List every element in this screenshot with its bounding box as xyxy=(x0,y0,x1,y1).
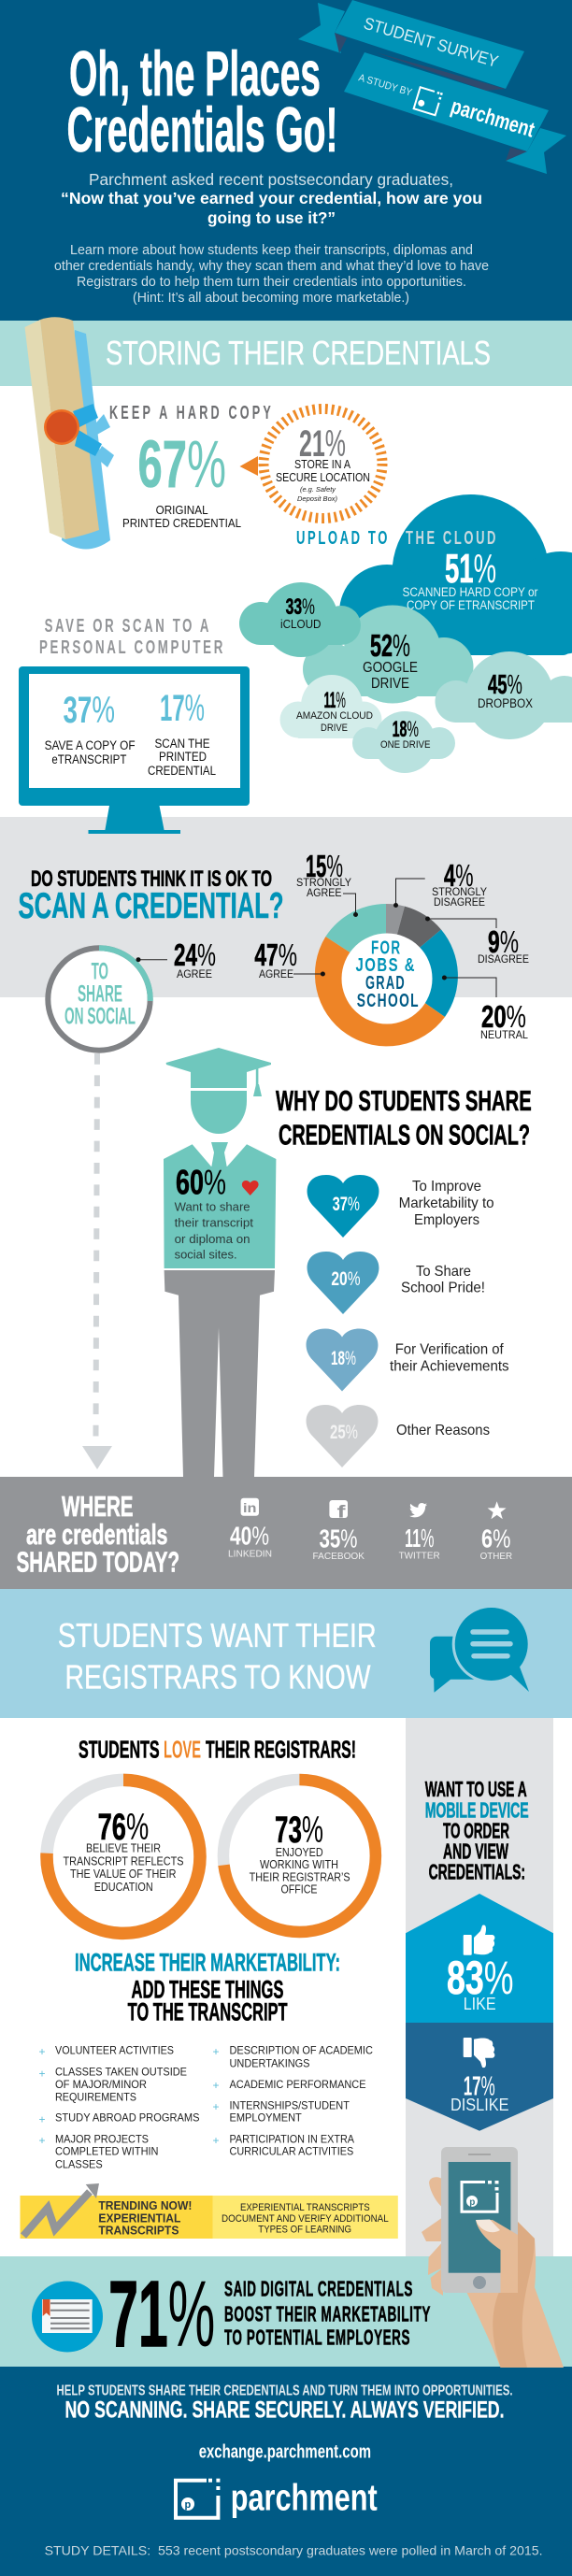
heading: increase their marketability: TO THE TRANSCRIPT xyxy=(128,1998,288,2026)
icon: graduate figure xyxy=(164,1048,276,1477)
donut chart: for jobs and grad school: SCHOOL xyxy=(357,991,420,1011)
donut label: 9% disagree: DISAGREE xyxy=(478,954,529,966)
donut label: 47% agree: AGREE xyxy=(259,969,293,980)
donut label: 4% strongly disagree xyxy=(393,858,487,909)
icon: hand holding phone xyxy=(422,2147,564,2368)
cloud: 51% scanned xyxy=(339,494,572,660)
icon: computer monitor with stats: 17% xyxy=(160,688,205,729)
stat: 71% boost marketability: 71% xyxy=(108,2262,215,2367)
list: transcript additions column two: UNDERTAKINGS xyxy=(230,2057,310,2070)
logo: parchment: p xyxy=(185,2499,191,2511)
ring chart: to share on social xyxy=(48,948,150,1051)
ring chart: 73% enjoyed: WORKING WITH xyxy=(260,1858,338,1871)
ribbon: student survey xyxy=(298,0,566,174)
intro text: Parchment asked recent postsecondary graduates, xyxy=(89,170,453,189)
stat: 71% boost marketability xyxy=(108,2262,431,2367)
cloud: 33% icloud: 33% xyxy=(286,594,315,620)
icon: computer monitor with stats: SCAN THE xyxy=(155,737,209,751)
donut label: 20% neutral xyxy=(442,976,529,1041)
list: transcript additions column two: EMPLOYMENT xyxy=(230,2111,302,2125)
ring chart: 73% enjoyed: ENJOYED xyxy=(276,1846,323,1859)
heart stat: 20% school pride: 20% xyxy=(331,1268,361,1290)
heart stat: 37% marketability: To Improve xyxy=(412,1179,481,1195)
donut label: 4% strongly disagree: STRONGLY xyxy=(432,887,487,898)
list: transcript additions column two: DESCRIPTION OF ACADEMIC xyxy=(230,2043,373,2056)
cloud: 11% amazon cloud drive xyxy=(280,675,381,738)
stat: other 6%: OTHER xyxy=(480,1551,512,1562)
ring chart: 76% believe: TRANSCRIPT REFLECTS xyxy=(64,1855,183,1868)
stat: 17% dislike xyxy=(406,2023,553,2131)
intro text xyxy=(54,170,489,306)
list: transcript additions column one: CLASSES xyxy=(55,2157,103,2170)
heart stat: 25% other reasons: 25% xyxy=(330,1422,358,1443)
intro text: “Now that you’ve earned your credential, how are you xyxy=(61,189,482,208)
heading: students want their registrars to know: STUDENTS WANT THEIR xyxy=(58,1616,377,1654)
list: transcript additions column two: + xyxy=(213,2045,220,2058)
heading: students want their registrars to know xyxy=(58,1616,377,1696)
heading: save or scan to a personal computer xyxy=(39,616,225,658)
stat: linkedin 40%: LINKEDIN xyxy=(228,1549,272,1560)
stat: 83% like xyxy=(406,1894,553,2023)
panel: mobile device heading xyxy=(425,1777,529,1884)
donut chart: for jobs and grad school: FOR xyxy=(371,938,401,959)
icon: computer monitor with stats: eTRANSCRIPT xyxy=(51,752,126,766)
donut label: 4% strongly disagree: DISAGREE xyxy=(434,897,485,909)
ring chart: 73% enjoyed: OFFICE xyxy=(280,1883,318,1896)
footer call to action xyxy=(56,2383,512,2462)
stat: other 6% xyxy=(480,1501,512,1562)
list: transcript additions column one: + xyxy=(39,2067,46,2080)
stat: linkedin 40%: in xyxy=(243,1500,256,1515)
arrow: to 67% xyxy=(239,456,258,476)
heading: students want their registrars to know: REGISTRARS TO KNOW xyxy=(65,1658,371,1696)
callout: trending now experiential transcripts: EXPERIENTIAL xyxy=(98,2211,180,2225)
ring chart: to share on social: SHARE xyxy=(78,981,122,1008)
logo: parchment xyxy=(174,2478,378,2520)
heart stat: 37% marketability xyxy=(307,1175,494,1238)
stat: facebook 35%: 35% xyxy=(320,1524,357,1553)
stat: 83% like: 83% xyxy=(447,1952,514,2004)
donut label: 20% neutral: 20% xyxy=(481,999,526,1034)
cloud: 45% dropbox: 45% xyxy=(488,670,522,700)
cloud: 51% scanned: SCANNED HARD COPY or xyxy=(402,585,538,599)
stat: twitter 11%: TWITTER xyxy=(399,1551,440,1562)
stat: 83% like: LIKE xyxy=(464,1995,496,2013)
arrow: dashed down to where shared xyxy=(82,1053,112,1469)
list: transcript additions column one: + xyxy=(39,2134,46,2147)
callout: secure location: 21% xyxy=(299,423,346,465)
donut chart: for jobs and grad school: JOBS & xyxy=(355,955,416,976)
heading: students love their registrars: LOVE xyxy=(164,1736,201,1764)
icon: digital document in circle xyxy=(32,2281,103,2352)
cloud: 11% amazon cloud drive: AMAZON CLOUD xyxy=(296,710,373,722)
heading: do students think it is ok to scan xyxy=(19,866,284,926)
donut label: 15% strongly agree: STRONGLY xyxy=(296,878,351,889)
ring chart: to share on social: TO xyxy=(92,959,108,985)
ring chart: 73% enjoyed: 73% xyxy=(275,1810,323,1851)
intro text: other credentials handy, why they scan them and what they’d love to have xyxy=(54,259,489,274)
list: transcript additions column two: + xyxy=(213,2079,220,2092)
heart stat: 18% verification xyxy=(307,1329,509,1391)
list: transcript additions column one xyxy=(39,2043,200,2170)
cloud: 51% scanned: 51% xyxy=(445,546,496,592)
stat: 60% want to share: their transcript xyxy=(175,1216,253,1230)
ring chart: 76% believe: 76% xyxy=(98,1807,149,1848)
cloud: 18% one drive: ONE DRIVE xyxy=(380,739,430,751)
donut label: 20% neutral: NEUTRAL xyxy=(480,1030,529,1041)
list: transcript additions column two xyxy=(213,2043,373,2158)
list: transcript additions column one: STUDY ABROAD PROGRAMS xyxy=(55,2111,200,2125)
ring chart: 73% enjoyed: THEIR REGISTRAR’S xyxy=(250,1871,350,1884)
donut label: 47% agree xyxy=(254,937,325,980)
callout: secure location: SECURE LOCATION xyxy=(276,471,370,484)
icon: computer monitor with stats: SAVE A COPY OF xyxy=(45,738,136,752)
list: transcript additions column two: + xyxy=(213,2100,220,2113)
heading: where are credentials shared today xyxy=(17,1490,179,1579)
heading: students love their registrars xyxy=(79,1736,356,1764)
list: transcript additions column two: PARTICIPATION IN EXTRA xyxy=(230,2132,354,2145)
icon: computer monitor with stats: PRINTED xyxy=(159,750,207,764)
heading: where are credentials shared today: SHARED TODAY? xyxy=(17,1546,179,1579)
title: Oh, the Places xyxy=(69,38,321,109)
panel: keep a hard copy: KEEP A HARD COPY xyxy=(109,403,274,423)
panel: keep a hard copy: ORIGINAL xyxy=(156,503,208,517)
list: transcript additions column two: ACADEMIC PERFORMANCE xyxy=(230,2078,366,2091)
ribbon: student survey: parchment xyxy=(449,93,537,142)
heart stat: 37% marketability: 37% xyxy=(333,1194,360,1215)
heading: save or scan to a personal computer: PERSONAL COMPUTER xyxy=(39,637,225,658)
stat: 17% dislike: 17% xyxy=(464,2072,495,2102)
intro text: going to use it?” xyxy=(207,208,336,227)
stat: twitter 11%: 11% xyxy=(405,1524,434,1553)
donut label: 15% strongly agree xyxy=(296,849,358,917)
list: transcript additions column one: + xyxy=(39,2112,46,2125)
heading: upload to the cloud: THE CLOUD xyxy=(406,528,498,549)
heading: where are credentials shared today: WHERE xyxy=(62,1490,133,1523)
cloud: 45% dropbox: DROPBOX xyxy=(478,696,533,710)
ring chart: 73% enjoyed xyxy=(223,1780,376,1932)
heading: where are credentials shared today: are credentials xyxy=(26,1518,168,1551)
panel: keep a hard copy xyxy=(109,403,274,530)
callout: trending now experiential transcripts: DOCUMENT AND VERIFY ADDITIONAL xyxy=(222,2213,389,2225)
list: transcript additions column two: INTERNSHIPS/STUDENT xyxy=(230,2099,350,2112)
study details: STUDY DETAILS: 553 recent postscondary graduates were polled in March of 2015. xyxy=(45,2542,543,2557)
cloud: 11% amazon cloud drive: DRIVE xyxy=(321,723,348,734)
icon: speech bubbles xyxy=(430,1605,531,1693)
cloud: 52% google drive: GOOGLE xyxy=(363,660,418,676)
ring label: 24% agree: 24% xyxy=(174,937,216,972)
callout: trending now experiential transcripts: TYPES OF LEARNING xyxy=(258,2225,351,2236)
list: transcript additions column one: CLASSES TAKEN OUTSIDE xyxy=(55,2066,187,2079)
stat: 60% want to share: 60% xyxy=(176,1164,226,1202)
heading: increase their marketability: ADD THESE THINGS xyxy=(131,1976,284,2004)
icon: hand holding phone: p xyxy=(469,2197,475,2208)
stat: 71% boost marketability: SAID DIGITAL CREDENTIALS xyxy=(224,2277,413,2301)
heading: why do students share xyxy=(276,1084,532,1151)
heading: increase their marketability xyxy=(75,1948,340,2026)
callout: secure location: Deposit Box) xyxy=(297,494,338,503)
stat: twitter 11% xyxy=(399,1503,440,1562)
cloud: 52% google drive: DRIVE xyxy=(371,676,409,692)
heading: do students think it is ok to scan: SCAN A CREDENTIAL? xyxy=(19,886,284,926)
heart stat: 20% school pride: School Pride! xyxy=(401,1281,485,1296)
logo: parchment: parchment xyxy=(231,2478,378,2519)
list: transcript additions column one: REQUIREMENTS xyxy=(55,2091,136,2104)
ring chart: 76% believe xyxy=(47,1780,200,1933)
heading: students love their registrars: THEIR REGISTRARS! xyxy=(206,1736,356,1764)
callout: trending now experiential transcripts: TRANSCRIPTS xyxy=(98,2224,179,2238)
stat: 71% boost marketability: BOOST THEIR MARKETABILITY xyxy=(224,2301,431,2326)
cloud: 33% icloud: iCLOUD xyxy=(280,618,322,631)
callout: secure location: (e.g. Safety xyxy=(300,485,336,494)
list: transcript additions column two: CURRICULAR ACTIVITIES xyxy=(230,2145,353,2158)
list: transcript additions column one: COMPLETED WITHIN xyxy=(55,2145,159,2158)
panel: mobile device heading: AND VIEW xyxy=(443,1839,508,1863)
heading: increase their marketability: INCREASE THEIR MARKETABILITY: xyxy=(75,1948,340,1976)
donut label: 9% disagree: 9% xyxy=(488,924,519,959)
ring chart: 76% believe: EDUCATION xyxy=(94,1881,153,1894)
stat: linkedin 40%: 40% xyxy=(230,1522,269,1551)
intro text: Registrars do to help them turn their credentials into opportunities. xyxy=(77,275,466,290)
cloud: 52% google drive: 52% xyxy=(370,628,410,663)
cloud: 11% amazon cloud drive: 11% xyxy=(324,688,346,713)
stat: facebook 35%: f xyxy=(336,1503,347,1522)
stat: 60% want to share xyxy=(175,1164,259,1262)
callout: trending now experiential transcripts xyxy=(21,2183,398,2239)
list: transcript additions column two: + xyxy=(213,2134,220,2147)
heart stat: 20% school pride xyxy=(307,1252,485,1314)
ring chart: 76% believe: BELIEVE THEIR xyxy=(86,1842,161,1855)
stat: linkedin 40% xyxy=(228,1498,272,1560)
icon: diploma scroll xyxy=(24,317,114,550)
stat: facebook 35% xyxy=(312,1500,365,1562)
heart stat: 25% other reasons xyxy=(307,1405,490,1467)
heart stat: 20% school pride: To Share xyxy=(416,1264,471,1280)
icon: computer monitor with stats: 37% xyxy=(64,690,115,731)
list: transcript additions column one: MAJOR PROJECTS xyxy=(55,2132,149,2145)
stat: 71% boost marketability: TO POTENTIAL EMPLOYERS xyxy=(224,2325,410,2349)
cloud: 51% scanned: COPY OF ETRANSCRIPT xyxy=(407,598,535,612)
callout: secure location xyxy=(264,409,382,518)
donut label: 4% strongly disagree: 4% xyxy=(444,858,474,893)
donut label: 15% strongly agree: 15% xyxy=(306,849,343,883)
callout: trending now experiential transcripts: TRENDING NOW! xyxy=(98,2198,192,2212)
callout: secure location: STORE IN A xyxy=(294,458,351,471)
stat: 60% want to share: social sites. xyxy=(175,1248,237,1262)
heading: upload to the cloud: UPLOAD TO xyxy=(296,528,390,549)
heart stat: 37% marketability: Employers xyxy=(414,1212,479,1228)
heart stat: 18% verification: their Achievements xyxy=(390,1359,509,1375)
list: transcript additions column one: VOLUNTEER ACTIVITIES xyxy=(55,2043,174,2056)
panel: keep a hard copy: 67% xyxy=(138,428,226,502)
panel: mobile device heading: TO ORDER xyxy=(443,1819,509,1843)
title: Credentials Go! xyxy=(67,94,338,165)
callout: trending now experiential transcripts: EXPERIENTIAL TRANSCRIPTS xyxy=(240,2202,370,2213)
ring label: 24% agree: AGREE xyxy=(177,969,212,980)
donut label: 9% disagree xyxy=(425,916,529,966)
ribbon: student survey: STUDENT SURVEY xyxy=(362,14,500,71)
intro text: (Hint: It’s all about becoming more marketable.) xyxy=(133,291,409,306)
heart stat: 25% other reasons: Other Reasons xyxy=(396,1423,490,1438)
cloud: 33% icloud xyxy=(239,582,361,657)
heart stat: 18% verification: 18% xyxy=(331,1348,356,1369)
donut label: 15% strongly agree: AGREE xyxy=(307,888,342,899)
ribbon: student survey: A STUDY BY xyxy=(357,72,414,99)
cloud: 18% one drive: 18% xyxy=(393,717,419,742)
ring label: 24% agree xyxy=(136,937,216,980)
ring chart: to share on social: ON SOCIAL xyxy=(64,1004,136,1030)
list: transcript additions column one: OF MAJOR/MINOR xyxy=(55,2078,147,2091)
cloud: 52% google drive xyxy=(303,606,473,703)
icon: computer monitor with stats: CREDENTIAL xyxy=(148,764,216,778)
heading: do students think it is ok to scan: DO STUDENTS THINK IT IS OK TO xyxy=(31,866,272,892)
panel: keep a hard copy: PRINTED CREDENTIAL xyxy=(122,516,241,530)
list: transcript additions column one: + xyxy=(39,2045,46,2058)
ring chart: 76% believe: THE VALUE OF THEIR xyxy=(70,1868,176,1881)
donut label: 47% agree: 47% xyxy=(254,937,297,972)
stat: 17% dislike: DISLIKE xyxy=(450,2096,508,2114)
title xyxy=(67,38,338,165)
donut chart: for jobs and grad school xyxy=(315,904,458,1046)
stat: facebook 35%: FACEBOOK xyxy=(312,1551,365,1562)
heading: save or scan to a personal computer: SAVE OR SCAN TO A xyxy=(45,616,211,637)
stat: 60% want to share: Want to share xyxy=(175,1200,250,1214)
heading: students love their registrars: STUDENTS xyxy=(79,1736,160,1764)
stat: other 6%: 6% xyxy=(481,1524,510,1553)
intro text: Learn more about how students keep their transcripts, diplomas and xyxy=(70,243,473,258)
donut chart: for jobs and grad school: GRAD xyxy=(365,973,406,994)
footer call to action: exchange.parchment.com xyxy=(199,2441,371,2462)
heart stat: 37% marketability: Marketability to xyxy=(399,1195,494,1211)
icon: computer monitor with stats xyxy=(19,666,250,834)
cloud: 45% dropbox xyxy=(436,651,572,739)
heart stat: 18% verification: For Verification of xyxy=(395,1342,504,1358)
stat: 60% want to share: or diploma on xyxy=(175,1232,250,1246)
cloud: 18% one drive xyxy=(352,711,455,773)
